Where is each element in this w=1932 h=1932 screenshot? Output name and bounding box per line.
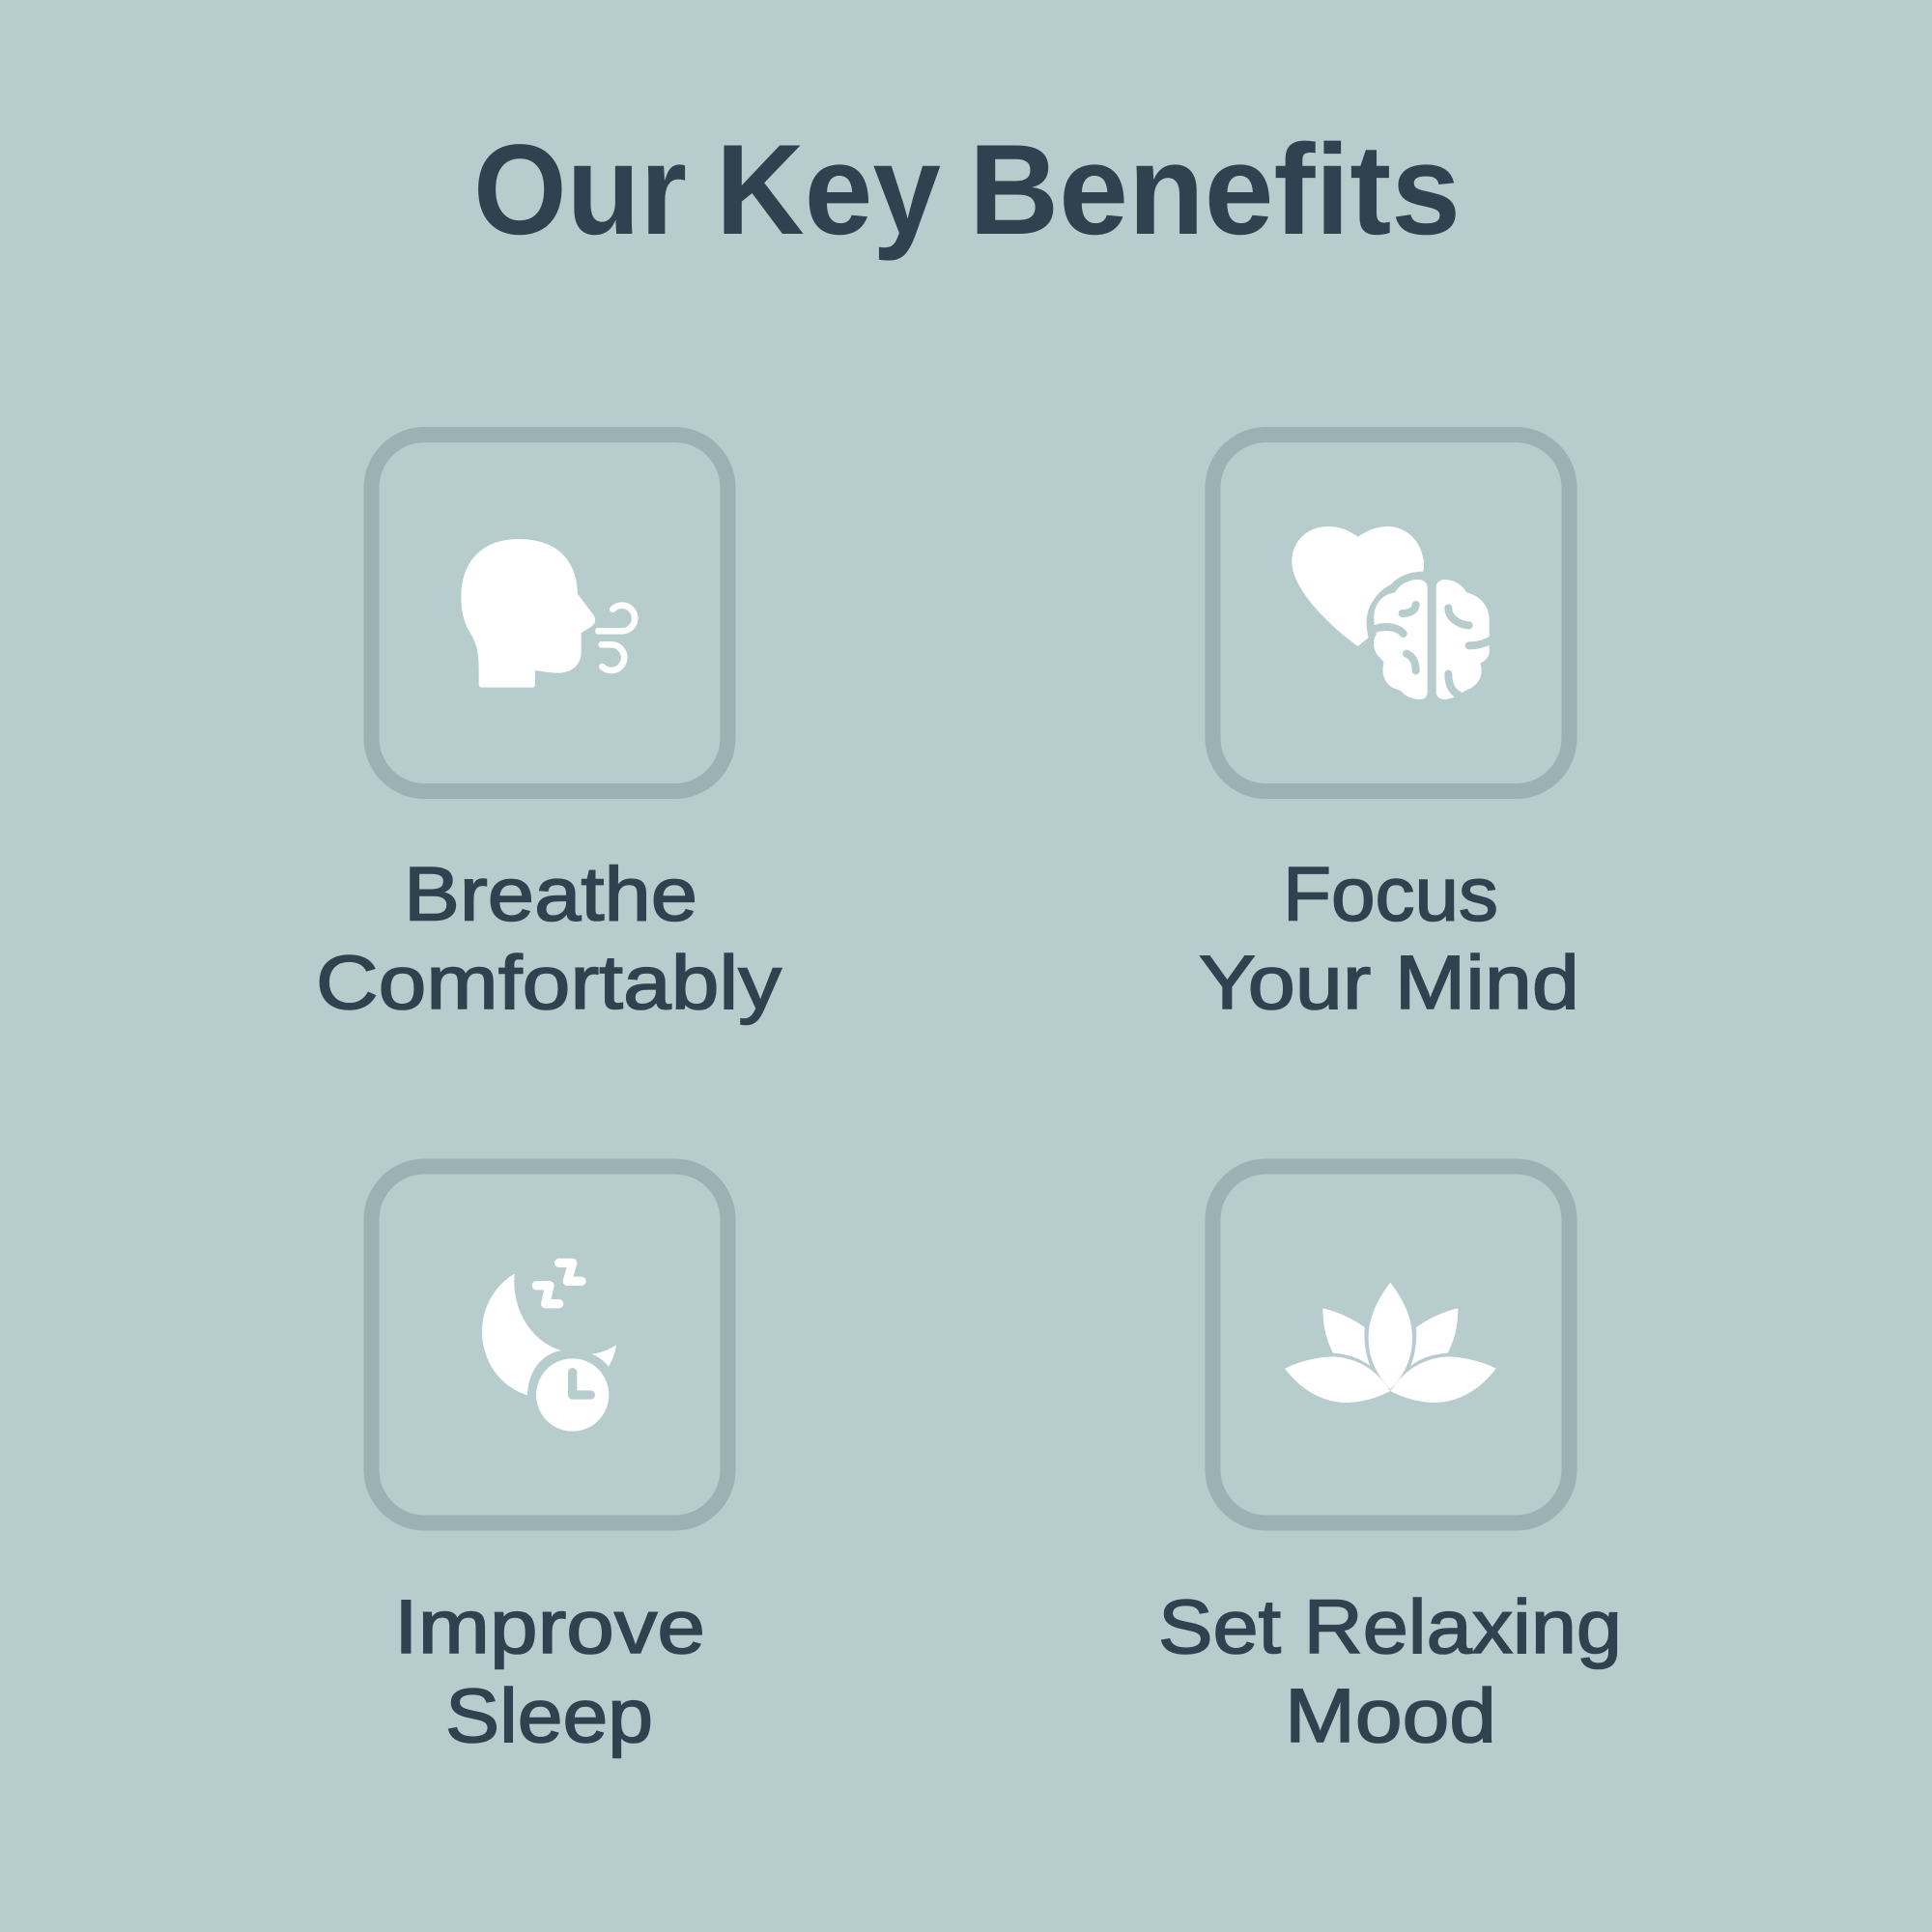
panel: improve sleep	[371, 1167, 728, 1758]
panel: breathe comfortably	[316, 435, 782, 1025]
label: focus your mind	[1199, 850, 1579, 1025]
label: improve sleep: Improve	[394, 1583, 705, 1669]
icon frame: focus	[1213, 435, 1569, 791]
icon frame: breathe	[371, 435, 728, 791]
label: set relaxing mood: Mood	[1285, 1672, 1496, 1758]
panel: set relaxing mood	[1158, 1167, 1622, 1758]
icon: head breathing	[461, 539, 635, 688]
label: improve sleep	[394, 1583, 705, 1758]
label: set relaxing mood: Set Relaxing	[1158, 1583, 1622, 1669]
label: breathe comfortably: Comfortably	[316, 939, 782, 1025]
label: improve sleep: Sleep	[445, 1672, 653, 1758]
label: focus your mind: Focus	[1283, 850, 1498, 937]
icon: lotus	[1285, 1283, 1496, 1403]
title: Key	[716, 119, 941, 262]
label: breathe comfortably	[316, 850, 782, 1025]
title: Our	[473, 119, 687, 262]
icon frame: mood	[1213, 1167, 1569, 1522]
label: focus your mind: Your Mind	[1199, 939, 1579, 1025]
icon: heart and brain	[1292, 526, 1492, 699]
label: set relaxing mood	[1158, 1583, 1622, 1758]
title: Benefits	[969, 119, 1461, 262]
icon: moon and clock	[482, 1263, 616, 1432]
icon frame: sleep	[371, 1167, 728, 1522]
panel: focus your mind	[1199, 435, 1579, 1025]
label: breathe comfortably: Breathe	[404, 850, 697, 937]
